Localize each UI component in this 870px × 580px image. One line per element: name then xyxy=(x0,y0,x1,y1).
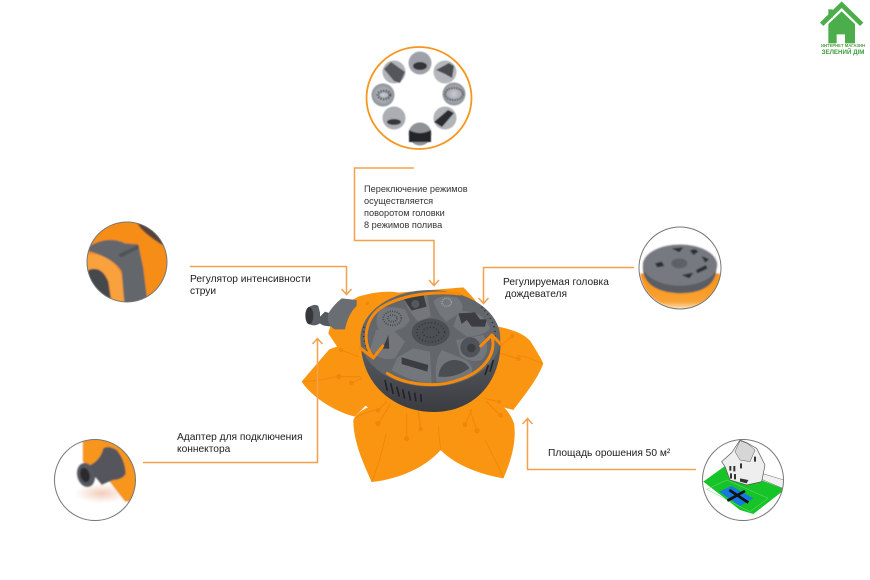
dotted spray patterns xyxy=(383,311,401,325)
logo: Зелений Дім xyxy=(820,1,865,56)
logo text: ИНТЕРНЕТ МАГАЗИН xyxy=(821,43,865,48)
bottom right petal xyxy=(440,397,515,478)
arrow: adapter xyxy=(143,338,322,462)
text: mode switching: поворотом головки xyxy=(364,208,445,218)
panel: adapter close-up xyxy=(54,439,136,521)
arrow: intensity regulator xyxy=(190,266,352,294)
panel: irrigation area illustration xyxy=(702,439,784,521)
sprinkler head xyxy=(360,290,501,412)
text: mode switching: Переключение режимов xyxy=(364,184,468,194)
orange flower base xyxy=(302,287,543,482)
left petal xyxy=(302,343,390,417)
panel: regulator close-up xyxy=(86,222,168,302)
arrow: mode switching xyxy=(354,168,439,286)
mode recesses xyxy=(383,294,487,377)
stamens xyxy=(339,337,517,438)
right petal xyxy=(477,327,543,410)
adapter connector xyxy=(305,298,357,329)
text: irrigation area: Площадь орошения 50 м² xyxy=(548,448,671,459)
text: mode switching: осуществляется xyxy=(364,196,433,206)
center spray dome xyxy=(412,319,450,346)
text: adapter: коннектора xyxy=(177,444,231,455)
rotation arrows xyxy=(360,293,502,385)
logo text xyxy=(821,43,865,56)
logo text: ЗЕЛЕНИЙ ДІМ xyxy=(822,48,864,56)
center fill under head xyxy=(347,313,517,427)
house xyxy=(722,440,765,485)
text: intensity regulator: Регулятор интенсивности xyxy=(190,274,311,285)
back petals xyxy=(328,287,503,377)
text: intensity regulator: струи xyxy=(190,286,216,297)
text: mode switching: 8 режимов полива xyxy=(364,220,443,230)
bottom left petal xyxy=(353,403,447,482)
panel: eight spray modes xyxy=(366,47,472,149)
side dots xyxy=(364,307,495,360)
icon: green house xyxy=(820,1,863,43)
connector lines with arrows xyxy=(143,168,696,470)
petal creases xyxy=(303,355,542,481)
mode panels xyxy=(370,295,490,383)
text: adjustable head: дождевателя xyxy=(505,289,567,300)
panel: adjustable head close-up xyxy=(638,226,722,310)
intensity regulator xyxy=(328,298,357,329)
arrow: irrigation area xyxy=(522,418,696,470)
text: adapter: Адаптер для подключения xyxy=(177,432,303,443)
mode thumbnails xyxy=(372,52,466,146)
text: adjustable head: Регулируемая головка xyxy=(503,277,609,288)
sprinkler product xyxy=(302,287,543,482)
vent slots xyxy=(385,360,493,402)
arrow: adjustable head xyxy=(478,268,634,304)
